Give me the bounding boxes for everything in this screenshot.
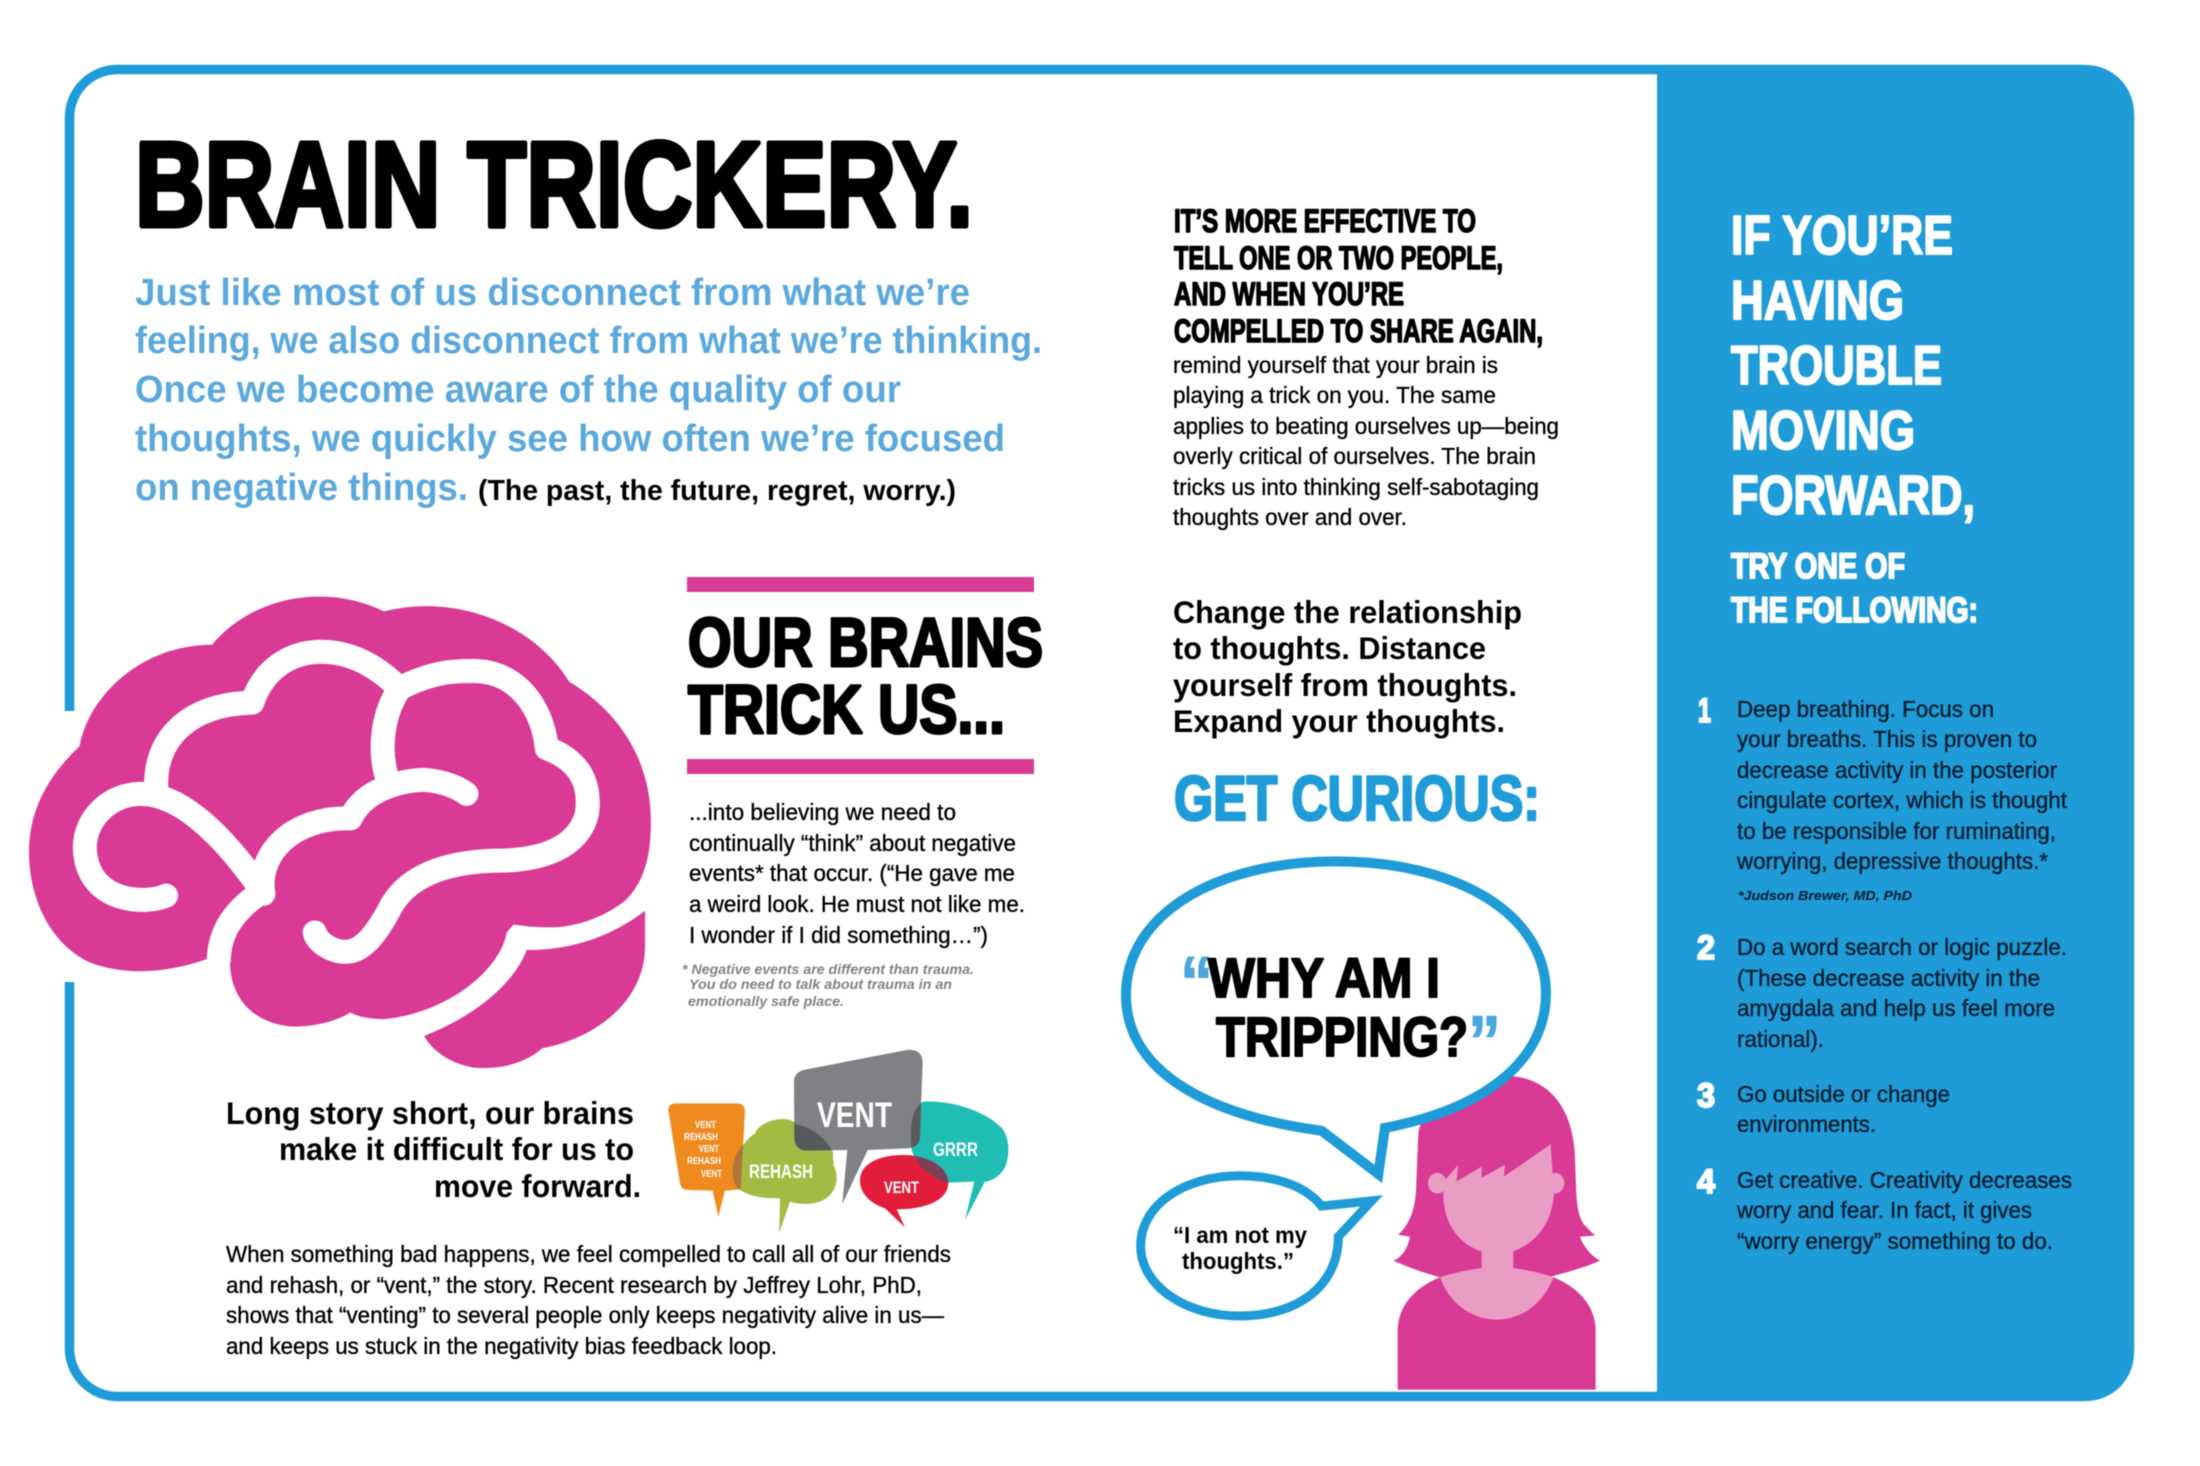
text: when something bad happens: and keeps us stuck in the negativity bias feedback loop.	[226, 1333, 777, 1359]
list item 4	[1697, 1163, 2072, 1254]
heading: if you're having trouble: IF YOU’RE	[1731, 204, 1953, 266]
heading: if you're having trouble: TROUBLE	[1731, 334, 1942, 396]
icon: pink brain	[29, 597, 651, 1068]
list item 1: 1	[1698, 692, 1711, 730]
footnote: negative events	[682, 962, 974, 1009]
icon: vent speech bubbles: VENT	[817, 1096, 892, 1135]
title: BRAIN TRICKERY.	[135, 116, 973, 252]
heading: more effective to tell: TELL ONE OR TWO PEOPLE,	[1174, 240, 1503, 276]
list item 2: (These decrease activity in the	[1737, 965, 2040, 991]
heading: if you're having trouble: FORWARD,	[1731, 464, 1975, 526]
list item 4: 4	[1697, 1163, 1715, 1201]
footnote: negative events: You do need to talk about trauma in an	[689, 977, 952, 992]
text: remind yourself: thoughts over and over.	[1173, 504, 1407, 530]
list item 1: cingulate cortex, which is thought	[1737, 787, 2067, 813]
intro paragraph: on negative things.	[135, 467, 468, 509]
heading: if you're having trouble: TRY ONE OF	[1731, 547, 1905, 586]
heading: more effective to tell	[1174, 203, 1543, 349]
text: into believing: a weird look. He must not like me.	[689, 891, 1025, 917]
list item 4: Get creative. Creativity decreases	[1737, 1167, 2072, 1193]
heading: get curious: GET CURIOUS:	[1174, 764, 1540, 834]
heading: if you're having trouble: MOVING	[1731, 399, 1915, 461]
callout: why am I tripping	[1126, 861, 1546, 1174]
callout: I am not my thoughts: thoughts.”	[1182, 1248, 1294, 1274]
text: long story short: make it difficult for us to	[279, 1131, 634, 1167]
list item 2: Do a word search or logic puzzle.	[1737, 934, 2067, 960]
icon: vent speech bubbles: VENT	[884, 1178, 919, 1197]
icon: vent speech bubbles: GRRR	[933, 1140, 978, 1161]
text: long story short: Long story short, our brains	[226, 1095, 634, 1131]
intro paragraph: thoughts, we quickly see how often we’re focused	[135, 418, 1005, 460]
list item 1: *Judson Brewer, MD, PhD	[1738, 888, 1913, 903]
intro paragraph: Once we become aware of the quality of our	[135, 369, 901, 411]
text: remind yourself: tricks us into thinking self-sabotaging	[1173, 474, 1539, 500]
list item 1: your breaths. This is proven to	[1737, 726, 2037, 752]
icon: vent speech bubbles: VENT	[699, 1144, 719, 1155]
list item 1: worrying, depressive thoughts.*	[1736, 848, 2048, 874]
callout: why am I tripping: “	[1180, 943, 1213, 1023]
text: into believing: continually “think” about negative	[689, 830, 1016, 856]
callout: why am I tripping: WHY AM I	[1208, 946, 1440, 1009]
intro paragraph	[135, 272, 1042, 509]
panel: blue sidebar background	[1657, 65, 2134, 1401]
heading: our brains trick us: TRICK US...	[688, 671, 1005, 748]
callout: why am I tripping: TRIPPING?	[1216, 1005, 1468, 1068]
list item 1: Deep breathing. Focus on	[1737, 696, 1994, 722]
text: remind yourself: remind yourself that your brain is	[1173, 352, 1498, 378]
text: into believing: I wonder if I did something…”)	[689, 922, 988, 948]
list item 3: Go outside or change	[1737, 1081, 1950, 1107]
text: remind yourself	[1173, 352, 1559, 530]
text: change the relationship: Change the relationship	[1173, 594, 1522, 630]
list item 2: amygdala and help us feel more	[1737, 995, 2055, 1021]
text: remind yourself: applies to beating ourselves up—being	[1173, 413, 1559, 439]
icon: vent speech bubbles	[668, 1050, 1008, 1233]
icon: vent speech bubbles: VENT	[701, 1169, 722, 1180]
text: change the relationship: Expand your thoughts.	[1173, 703, 1505, 739]
intro paragraph: (The past, the future, regret, worry.)	[478, 475, 956, 507]
icon: vent speech bubbles: REHASH	[749, 1162, 813, 1183]
list item 4: worry and fear. In fact, it gives	[1736, 1197, 2032, 1223]
heading: our brains trick us: OUR BRAINS	[688, 604, 1043, 681]
text: when something bad happens: When something bad happens, we feel compelled to call all of our friends	[226, 1241, 951, 1267]
list item 1: to be responsible for ruminating,	[1737, 818, 2056, 844]
list item 3	[1697, 1077, 1950, 1137]
heading: our brains trick us	[687, 577, 1043, 774]
text: when something bad happens: and rehash, or “vent,” the story. Recent research by Jeffrey Lohr, PhD,	[226, 1272, 922, 1298]
list item 3: 3	[1697, 1077, 1715, 1115]
list item 2	[1697, 929, 2067, 1052]
footnote: negative events: * Negative events are different than trauma.	[682, 962, 974, 977]
callout: I am not my thoughts: “I am not my	[1173, 1222, 1307, 1248]
text: into believing: ...into believing we need to	[689, 799, 956, 825]
heading: more effective to tell: COMPELLED TO SHARE AGAIN,	[1174, 313, 1543, 349]
icon: vent speech bubbles: REHASH	[684, 1132, 718, 1143]
icon: vent speech bubbles: REHASH	[687, 1156, 721, 1167]
text: when something bad happens: shows that “venting” to several people only keeps negativity alive in us—	[226, 1302, 944, 1328]
text: when something bad happens	[226, 1241, 951, 1359]
text: change the relationship	[1173, 594, 1522, 739]
intro paragraph: feeling, we also disconnect from what we’re thinking.	[135, 320, 1042, 362]
text: long story short	[226, 1095, 641, 1204]
text: into believing	[689, 799, 1025, 948]
heading: if you're having trouble: THE FOLLOWING:	[1731, 591, 1978, 630]
icon: vent speech bubbles: VENT	[695, 1120, 716, 1131]
heading: more effective to tell: IT’S MORE EFFECTIVE TO	[1174, 203, 1476, 239]
list item 1: decrease activity in the posterior	[1737, 757, 2057, 783]
text: long story short: move forward.	[434, 1168, 641, 1204]
heading: if you're having trouble: HAVING	[1731, 269, 1904, 331]
heading: more effective to tell: AND WHEN YOU’RE	[1174, 276, 1404, 312]
footnote: negative events: emotionally safe place.	[688, 994, 844, 1009]
heading: if you're having trouble	[1731, 204, 1978, 630]
text: change the relationship: yourself from thoughts.	[1173, 667, 1517, 703]
text: remind yourself: overly critical of ourselves. The brain	[1173, 443, 1536, 469]
text: remind yourself: playing a trick on you. The same	[1173, 382, 1496, 408]
text: change the relationship: to thoughts. Distance	[1173, 630, 1486, 666]
list item 3: environments.	[1737, 1111, 1876, 1137]
list item 4: “worry energy” something to do.	[1737, 1228, 2053, 1254]
callout: why am I tripping: ”	[1468, 1002, 1501, 1082]
illustration: woman	[1393, 1076, 1600, 1390]
intro paragraph: Just like most of us disconnect from what we’re	[135, 272, 970, 314]
list item 2: 2	[1697, 929, 1715, 967]
list item 2: rational).	[1737, 1026, 1824, 1052]
text: into believing: events* that occur. (“He gave me	[689, 860, 1015, 886]
callout: I am not my thoughts	[1141, 1176, 1372, 1316]
list item 1	[1698, 692, 2067, 903]
